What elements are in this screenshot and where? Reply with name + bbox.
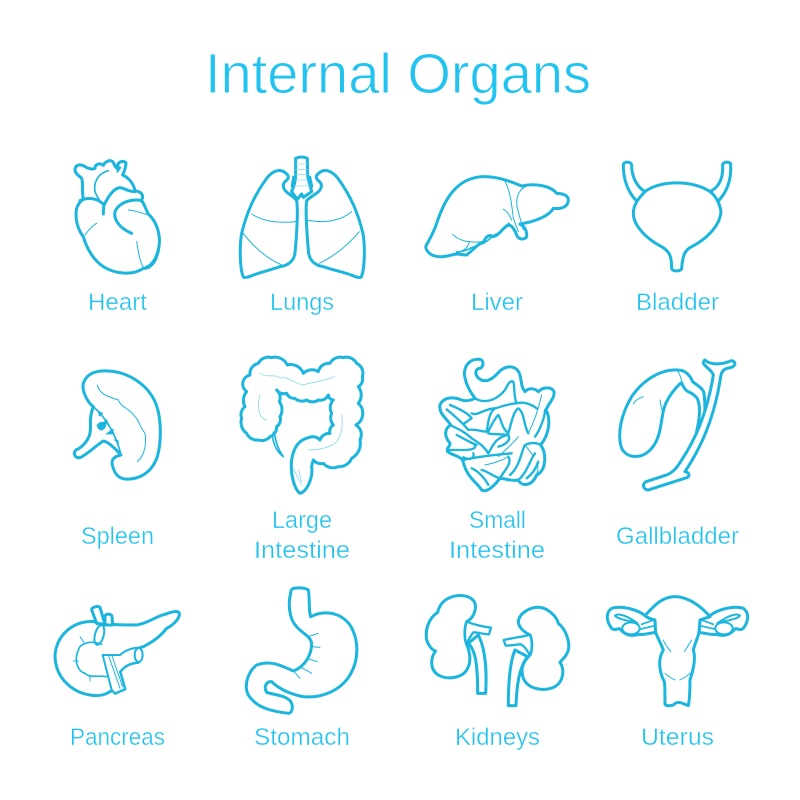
label: pancreas: Pancreas: [70, 724, 165, 751]
panel: small intestine: [440, 359, 554, 564]
panel: large intestine: [241, 357, 363, 564]
panel: pancreas: [55, 607, 179, 751]
icon: heart: [75, 161, 159, 273]
icon: uterus: [607, 597, 748, 706]
panel: gallbladder: [616, 360, 739, 550]
panel: stomach: [246, 588, 357, 751]
label: heart: Heart: [88, 289, 147, 316]
icon: kidneys: [426, 596, 569, 706]
panel: uterus: [607, 597, 748, 751]
panel: bladder: [623, 162, 731, 316]
icon: large intestine: [241, 357, 363, 493]
panel: kidneys: [426, 596, 569, 751]
icon: gallbladder: [620, 360, 735, 490]
panel: spleen: [74, 371, 160, 550]
panel: lungs: [240, 157, 364, 316]
label: small intestine: [449, 507, 545, 564]
label: large intestine: Large: [272, 507, 332, 534]
label: small intestine: Intestine: [449, 537, 545, 564]
label: lungs: Lungs: [270, 289, 334, 316]
label: gallbladder: Gallbladder: [616, 523, 739, 550]
icon: liver: [426, 177, 568, 257]
label: kidneys: Kidneys: [455, 724, 540, 751]
icon: pancreas: [55, 607, 179, 696]
label: stomach: Stomach: [254, 724, 350, 751]
icon: stomach: [246, 588, 357, 713]
icon: small intestine: [440, 359, 554, 491]
label: small intestine: Small: [469, 507, 526, 534]
label: large intestine: Intestine: [254, 537, 350, 564]
panel: liver: [426, 177, 568, 316]
icon: spleen: [74, 371, 160, 479]
label: large intestine: [254, 507, 350, 564]
label: liver: Liver: [471, 289, 523, 316]
label: uterus: Uterus: [641, 724, 714, 751]
icon: bladder: [623, 162, 731, 271]
panel: heart: [75, 161, 159, 316]
label: bladder: Bladder: [636, 289, 719, 316]
title: Internal Organs: [205, 42, 591, 106]
label: spleen: Spleen: [81, 523, 154, 550]
icon: lungs: [240, 157, 364, 277]
